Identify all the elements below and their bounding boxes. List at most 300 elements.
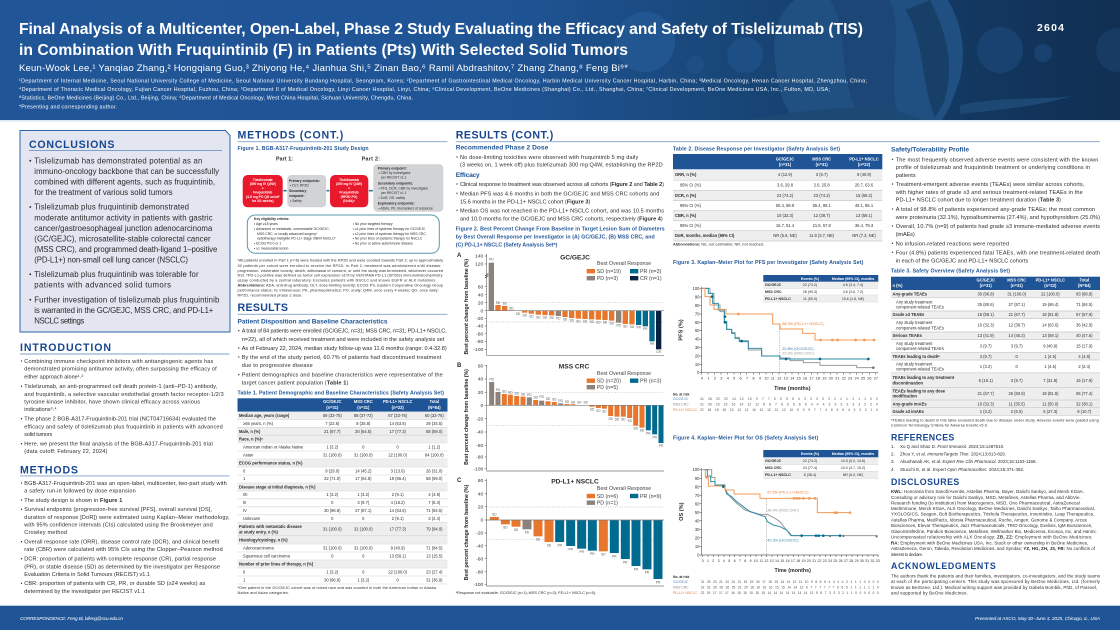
table 1: demographics: Unknown [243, 516, 261, 521]
table 1: demographics: GC/GEJC [323, 399, 342, 404]
disclosures: KWL: Honoraria from Sanofi/Aventis, Astellas Pharma, Bayer, Daiichi Sankyo, and Merck KGaA. [891, 489, 1084, 494]
figure 1 footnote: first. ᵇPD-L1-positive was defined as tumor cell expression ≥1% by VENTANA PD-L1 (SP263) immunohistochemistry [238, 274, 443, 278]
chart A: GC/GEJC waterfall: PR [650, 342, 655, 346]
table 1: demographics: 22 (100.0) [388, 452, 408, 458]
chart B: MSS CRC waterfall: PR [652, 435, 658, 439]
figure 4: OS Kaplan-Meier plot: 8 (36.4) [804, 473, 816, 477]
figure 1: study design: (N=84)ᵃ [343, 199, 355, 203]
figure 4: OS Kaplan-Meier plot: 10 [695, 544, 700, 549]
chart C: PD-L1+ NSCLC waterfall: -100 [473, 582, 484, 588]
figure 3: PFS Kaplan-Meier plot: 11 [771, 376, 775, 380]
table 2: disease response: MSS CRC [812, 156, 831, 161]
panel: methods: CBR: proportion of patients with CR, PR, or durable SD (≥24 weeks) as [24, 581, 206, 587]
chart B: MSS CRC waterfall: SD (n=20) [597, 379, 621, 385]
figure 3: PFS Kaplan-Meier plot: 18 [816, 376, 820, 380]
figure 4: OS Kaplan-Meier plot: 28 [849, 559, 853, 563]
figure 3: PFS Kaplan-Meier plot: 21 [835, 376, 839, 380]
safety and tolerability text: The most frequently observed adverse events were consistent with the known [896, 157, 1098, 163]
figure 4: OS Kaplan-Meier plot: GC/GEJC [673, 580, 689, 584]
figure 4: OS Kaplan-Meier plot: 20 [807, 559, 811, 563]
table 1: demographics: 31 (100.0) [354, 526, 373, 532]
panel: conclusions: is warranted in the GC/GEJC, MSS CRC, and PD-L1+ [34, 306, 214, 315]
chart B: MSS CRC waterfall: SD [546, 397, 551, 401]
chart A: GC/GEJC waterfall: SD [603, 321, 608, 325]
panel: introduction [20, 342, 230, 455]
table 2: disease response: 16.7, 51.4 [776, 223, 795, 228]
figure 1: study design: (300 mg IV Q4W) [250, 182, 276, 186]
table 3: safety overview: Serious TEAEs [892, 333, 923, 338]
chart B: MSS CRC waterfall: 60 [478, 363, 484, 369]
figure 3: PFS Kaplan-Meier plot: 100 [692, 286, 700, 291]
chart C: PD-L1+ NSCLC waterfall: PR [656, 580, 661, 584]
figure 4: OS Kaplan-Meier plot: 22 19 17 17 17 16 15 15 15 15 15 14 14 14 14 14 14 14 12 9 8 7 3 3 3 2 1 1 0 0 0 0 0 0 [701, 591, 879, 595]
references: Stucchi E, et al. Expert Opin Pharmacother. 2024;25:371-382. [900, 467, 1024, 472]
acknowledgments: known as BeiGene, Ltd.). Medical writing support was provided by Izabela Bombik, PhD, of Parexel, [891, 585, 1097, 590]
table 1: demographics: 0 [331, 500, 334, 505]
chart B: MSS CRC waterfall: B [457, 363, 462, 369]
panel: introduction: demonstrated promising antitumor activity, often surpassing the efficacy of [24, 366, 217, 372]
panel: conclusions: (PD-L1+) non-small cell lung cancer (NSCLC) [34, 256, 188, 265]
safety and tolerability text: Overall, 10.7% (n=9) of patients had grade ≥3 immune-mediated adverse events [896, 224, 1100, 230]
authors and affiliations: ⁴Department of Thoracic Medical Oncology, Fujian Cancer Hospital, Fuzhou, China; ⁵Department II of Medical Oncology, Linyi Cancer Hospital, Linyi, China; ⁶Clinical Development, BeOne Medicines (Shanghai) Co., Ltd., Shanghai, China; ⁷Clinical Development, BeOne Medicines USA, Inc., Fulton, MD, USA; [19, 87, 830, 93]
chart A: GC/GEJC waterfall: CR [656, 350, 662, 354]
panel: results: As of February 22, 2024, median study follow-up was 11.6 months (range: 0.4-32.8) [242, 346, 447, 352]
figure 3: PFS Kaplan-Meier plot: 3 [720, 376, 722, 380]
disclosures: Biosciences, Elevar Therapeutics, Jazz Pharmaceuticals, TRIO Oncology, Exelixis, IgM Biosciences, [891, 523, 1092, 528]
figure 4: OS Kaplan-Meier plot: 14 [775, 559, 779, 563]
figure 4: OS Kaplan-Meier plot: 13 [770, 559, 774, 563]
chart A: GC/GEJC waterfall: PD (n=3) [597, 276, 618, 282]
recommended phase 2 dose and efficacy text: No dose-limiting toxicities were observed with fruquintinib 5 mg daily [460, 155, 639, 161]
chart A: GC/GEJC waterfall: SD [596, 320, 601, 324]
figure 3: PFS Kaplan-Meier plot: Median (95% CI), months [832, 277, 874, 281]
table 3: safety overview: Any-grade TEAEs [892, 292, 928, 297]
table 3: safety overview: 13 (59.1) [1042, 333, 1059, 338]
table 2: disease response [673, 146, 882, 247]
table 1: demographics: 23 (27.4) [426, 570, 443, 574]
table 1: demographics: Median age, years (range) [239, 413, 290, 418]
figure 4: OS Kaplan-Meier plot: 10 [754, 559, 758, 563]
safety and tolerability text: patients [896, 173, 916, 179]
figure 1: study design: • Advanced or metastatic, unresectable GC/GEJC, [254, 227, 330, 231]
acknowledgments [891, 561, 1101, 596]
chart A: GC/GEJC waterfall: SD [502, 301, 508, 305]
figure 3: PFS Kaplan-Meier plot: 22 [842, 376, 846, 380]
figure 1: study design [238, 146, 443, 253]
panel: introduction: Tislelizumab, an anti-programmed cell death protein-1 (anti–PD-1) antibody, [24, 384, 218, 390]
figure 3: PFS Kaplan-Meier plot: 31 30 23 22 16 14 12 12 8 8 7 6 6 6 6 6 4 4 4 3 3 3 3 3 3 2 2 0 [700, 403, 878, 407]
figure 3: PFS Kaplan-Meier plot: 27 [874, 376, 878, 380]
figure 4: OS Kaplan-Meier plot: Time (months) [774, 568, 811, 574]
table 1: demographics: I/II [243, 492, 248, 497]
acknowledgments: and supported by BeOne Medicines. [891, 591, 968, 596]
table 2: disease response: (n=22) [858, 162, 871, 167]
table 3: safety overview: 27 (87.1) [1009, 302, 1026, 307]
table 1: demographics: ≥65 years, n (%) [243, 421, 274, 426]
chart C: PD-L1+ NSCLC waterfall: -20 [476, 531, 484, 537]
figure 3: PFS Kaplan-Meier plot: 25 [861, 376, 865, 380]
table 1: demographics: Squamous cell carcinoma [243, 554, 291, 558]
figure 3: PFS Kaplan-Meier plot: 22 18 15 15 13 13 12 10 12 12 12 12 10 9 9 9 7 7 4 6 5 5 4 3 3 2 1 0 [700, 408, 878, 412]
table 3: safety overview: 11 (50.0) [1042, 402, 1059, 406]
chart A: GC/GEJC waterfall: SD [516, 312, 521, 316]
figure 4: OS Kaplan-Meier plot: 25 [833, 559, 837, 563]
references [891, 433, 1037, 472]
table 3: safety overview: 2 (6.5) [1011, 409, 1023, 414]
chart C: PD-L1+ NSCLC waterfall: PD-L1+ NSCLC [551, 478, 599, 486]
acknowledgments: ACKNOWLEDGMENTS [891, 561, 996, 571]
table 1: demographics: 0 [331, 516, 334, 521]
figure 1: study design: Exploratory endpoints: [378, 201, 415, 205]
authors and affiliations [19, 63, 867, 110]
figure 3: PFS Kaplan-Meier plot: 60 [695, 320, 700, 325]
safety and tolerability text: in each of the GC/GEJC and PD-L1+ NSCLC cohorts [896, 258, 1029, 264]
table 1: demographics: (n=31) [326, 405, 339, 410]
table 1: demographics: 1 [243, 578, 246, 582]
figure 4: OS Kaplan-Meier plot: 48.4% (MSS CRC) [767, 509, 800, 513]
table 1: demographics: 9 (29.0) [325, 468, 340, 474]
table 3: safety overview: 9 (10.7) [1077, 409, 1092, 414]
figure 3: PFS Kaplan-Meier plot: 2 [714, 376, 716, 380]
title: in Combination With Fruquintinib (F) in Patients (Pts) With Selected Solid Tumors [19, 42, 628, 59]
chart B: MSS CRC waterfall: MSS CRC [559, 364, 589, 370]
figure 1: study design: • CBR by investigator [378, 171, 411, 175]
chart A: GC/GEJC waterfall: 40 [478, 292, 484, 298]
disclosures: Research funding (to institution) from Macrogenics, MSD, Ono Pharmaceutical, AstraZeneca/ [891, 500, 1081, 506]
chart C: PD-L1+ NSCLC waterfall: 60 [478, 478, 484, 484]
figure 3: PFS Kaplan-Meier plot: 15.6 (1.8, NE) [842, 297, 864, 301]
chart C: PD-L1+ NSCLC waterfall: SD [536, 538, 541, 542]
figure 4: OS Kaplan-Meier plot: 17 [791, 559, 795, 563]
table 1: demographics: Total [430, 399, 439, 404]
figure 3: PFS Kaplan-Meier plot: 30 [695, 345, 700, 350]
panel: methods: DCR: proportion of patients with complete response (CR), partial response [24, 556, 216, 562]
table 1: demographics: 1 (3.2) [326, 444, 339, 450]
chart B: MSS CRC waterfall: SD [514, 392, 520, 396]
table 1: demographics: 30 (96.8) [324, 578, 341, 582]
figure 4: OS Kaplan-Meier plot: 15 [780, 559, 784, 563]
chart B: MSS CRC waterfall: SD [508, 390, 513, 394]
table 2: disease response: 95% CI (%) [680, 182, 702, 188]
table 1: demographics: 21 (67.7) [324, 429, 341, 434]
figure 2 title: Figure 2. Best Percent Change From Baseline in Target Lesion Sum of Diameters [456, 227, 665, 233]
figure 1 footnote: RP2D, recommended phase 2 dose. [238, 293, 302, 297]
chart B: MSS CRC waterfall: PR [659, 444, 664, 448]
header banner [0, 0, 1120, 124]
references: Zhou Y, et al. ImmunoTargets Ther. 2024;13:813-829. [900, 452, 1006, 457]
safety and tolerability text: No infusion-related reactions were reported [896, 241, 1009, 247]
table 2: disease response: 4 (12.9) [778, 172, 793, 177]
references: 4. [891, 467, 895, 472]
chart A: GC/GEJC waterfall: Best Overall Response [597, 261, 651, 267]
table 1: demographics: 26 (31.0) [426, 468, 443, 474]
figure 4: OS Kaplan-Meier plot: Figure 4. Kaplan–Meier Plot for OS (Safety Analysis Set) [673, 435, 819, 441]
figure 4: OS Kaplan-Meier plot: 32 [870, 559, 874, 563]
chart A: GC/GEJC waterfall: CR (n=1) [640, 276, 662, 282]
table 2: disease response: 3.6, 29.8 [777, 182, 794, 188]
table 3: safety overview: 3 (9.7) [980, 354, 992, 359]
chart B: MSS CRC waterfall: 40 [478, 377, 484, 383]
table 3: safety overview: (n=31) [980, 283, 992, 288]
table 2: disease response: PD-L1+ NSCLC [849, 156, 879, 161]
figure 4: OS Kaplan-Meier plot: OS (%) [679, 502, 685, 521]
chart A: GC/GEJC waterfall: PR (n=3) [640, 269, 662, 275]
recommended phase 2 dose and efficacy text: (3 weeks on, 1 week off) plus tislelizumab 300 mg Q4W, establishing the RP2D [460, 163, 663, 169]
figure 4: OS Kaplan-Meier plot: 50 [695, 510, 700, 515]
figure 4: OS Kaplan-Meier plot: PD-L1+ NSCLC [765, 473, 791, 477]
chart A: GC/GEJC waterfall: PR [643, 327, 648, 331]
chart A: GC/GEJC waterfall: SD [522, 314, 528, 318]
table 3: safety overview: 18 (81.8) [1042, 391, 1059, 396]
panel: conclusions: Tislelizumab plus fruquintinib demonstrated [34, 203, 189, 212]
table 1: demographics: Race, n (%)ᵃ [239, 436, 263, 442]
figure 1: study design: • Safety [290, 199, 302, 203]
figure 1: study design: • ≤2 prior lines of systemic therapy for MSS CRC [353, 232, 426, 236]
table 1: demographics: 79 (94.0) [426, 526, 443, 532]
table 3: safety overview: (N=84) [1078, 283, 1091, 288]
table 2: disease response: DCR, n (%) [675, 193, 697, 198]
table 1: demographics: Male, n (%) [239, 429, 261, 434]
table 2: disease response: CBR, n (%) [675, 213, 697, 218]
figure 1: study design: radiotherapy-ineligible PD-L1+ stage IIIB/IV NSCLCᵇ [257, 236, 337, 240]
figure 4: OS Kaplan-Meier plot: 80 [695, 484, 700, 489]
chart C: PD-L1+ NSCLC waterfall: PR [590, 552, 595, 556]
table 3: safety overview: (n=22) [1044, 283, 1057, 288]
table 3: safety overview: 18 (58.1) [978, 312, 995, 317]
table 1: demographics: 1 (3.2) [326, 492, 339, 497]
figure 3: PFS Kaplan-Meier plot: 12 [777, 376, 781, 380]
references: 1. [891, 444, 895, 449]
figure 4: OS Kaplan-Meier plot: GC/GEJC [765, 459, 782, 463]
panel: introduction: and fruquintinib, a selective vascular endothelial growth factor receptor-1/2/3 [24, 392, 224, 398]
figure 4: OS Kaplan-Meier plot: 60 [695, 501, 700, 506]
figure 4: OS Kaplan-Meier plot: 21 [812, 559, 816, 563]
figure 3: PFS Kaplan-Meier plot: MSS CRC [673, 403, 689, 407]
chart B: MSS CRC waterfall: SD [502, 390, 507, 394]
chart A: GC/GEJC waterfall: SD [630, 325, 635, 329]
acknowledgments: at each of the participating centers. This study was sponsored by BeOne Medicines, Ltd. (formerly [891, 579, 1101, 584]
panel: methods: METHODS [20, 464, 78, 476]
table 3: safety overview: 7 (31.8) [1043, 378, 1058, 383]
table 1: demographics: (n=22) [392, 405, 404, 410]
figure 4: OS Kaplan-Meier plot: 10.5 (5.2, 14.6) [841, 459, 865, 463]
figure 1: study design: Figure 1. BGB-A317-Fruquintinib-201 Study Design [238, 146, 368, 152]
table 3: safety overview: 21 (67.7) [978, 391, 995, 396]
chart B: MSS CRC waterfall: SD [640, 429, 645, 433]
table 2: disease response: 3 (9.7) [816, 172, 828, 177]
chart A: GC/GEJC waterfall: SD [563, 318, 568, 322]
heading: results continued: RESULTS (CONT.) [456, 130, 553, 142]
table 1: demographics: ECOG performance status, n (%) [239, 460, 303, 466]
table 3: safety overview: 5 (16.1) [979, 378, 993, 383]
chart A: GC/GEJC waterfall: 20 [478, 300, 484, 306]
figure 4: OS Kaplan-Meier plot: 4 [723, 559, 725, 563]
figure 4: OS Kaplan-Meier plot: 30 [695, 527, 700, 532]
chart C: PD-L1+ NSCLC waterfall: Best percent change from baseline (%) [464, 484, 470, 580]
table 1: demographics: 13 (15.5) [426, 554, 443, 558]
table 1: demographics: 0 [362, 554, 365, 558]
chart B: MSS CRC waterfall: -60 [476, 443, 484, 449]
figure 4: OS Kaplan-Meier plot: 23 [823, 559, 827, 563]
figure 4: OS Kaplan-Meier plot: Median (95% CI), months [832, 452, 874, 456]
panel: introduction: The phase 2 BGB-A317-Fruquintinib-201 trial (NCT04716634) evaluated the [24, 416, 216, 422]
figure 1: study design: Part 1: [276, 157, 293, 163]
figure 3: PFS Kaplan-Meier plot: 16 [803, 376, 807, 380]
figure 3: PFS Kaplan-Meier plot: 26 [867, 376, 872, 380]
chart B: MSS CRC waterfall: -20 [476, 416, 484, 422]
safety and tolerability text: (imAEs) [896, 232, 915, 238]
panel: conclusions: NSCLC settings [34, 317, 84, 326]
table 3: safety overview: Any-grade imAEs [892, 402, 927, 406]
table 3: safety overview: 13 (41.9) [978, 333, 995, 338]
chart B: MSS CRC waterfall: SD [627, 419, 633, 423]
figure 4: OS Kaplan-Meier plot: 20 [695, 535, 700, 540]
figure 4: OS Kaplan-Meier plot: 8 [744, 559, 746, 563]
panel: results: Patient Disposition and Baseline Characteristics [238, 318, 388, 325]
table 1: demographics: Number of prior lines of therapy, n (%) [239, 562, 314, 566]
panel: methods: (PR), or stable disease (SD) as determined by the investigator per Response [24, 564, 220, 570]
table 1: demographics: 1 [243, 476, 246, 481]
table 3: safety overview: component-related TEAEs [896, 346, 944, 351]
figure 3: PFS Kaplan-Meier plot: Figure 3. Kaplan–Meier Plot for PFS per Investigator (Safety Analysis Set) [673, 260, 864, 266]
table 3: safety overview: 31 (100.0) [1007, 292, 1027, 297]
panel: introduction: INTRODUCTION [20, 342, 111, 354]
figure 3: PFS Kaplan-Meier plot: 4.6 (3.6, 7.2) [843, 290, 863, 294]
table 3: safety overview: 26 (83.9) [1009, 391, 1026, 396]
figure 4: OS Kaplan-Meier plot: 40 [695, 518, 700, 523]
table 1: demographics: 27 (87.1) [355, 508, 372, 513]
table 3: safety overview: TEAEs leading to deathᵇ [892, 354, 940, 359]
figure 1: study design: per RECIST v1.1 [381, 191, 407, 195]
figure 4: OS Kaplan-Meier plot: 2 [712, 559, 714, 563]
figure 4: OS Kaplan-Meier plot: 90 [695, 476, 700, 481]
table 3: safety overview: 0 [1016, 364, 1019, 369]
table 3: safety overview: modification [892, 394, 917, 399]
table 2: disease response: GC/GEJC [776, 156, 794, 161]
chart A: GC/GEJC waterfall: -80 [476, 339, 484, 345]
figure 3: PFS Kaplan-Meier plot: 0 [701, 376, 703, 380]
table 3: safety overview: MSS CRC [1007, 278, 1026, 283]
figure 3: PFS Kaplan-Meier plot: 40 [695, 337, 700, 342]
chart B: MSS CRC waterfall: SD [615, 418, 620, 422]
panel: conclusions: (GC/GEJC), microsatellite-stable colorectal cancer [34, 235, 211, 244]
chart A: GC/GEJC waterfall: 0 [481, 308, 484, 314]
table 1: demographics: MSS CRC [354, 399, 373, 404]
table 1: demographics: 19 (86.4) [390, 476, 407, 481]
chart A: GC/GEJC waterfall: SD [609, 321, 615, 325]
table 1: demographics: 2 (2.4) [428, 516, 441, 521]
chart C: PD-L1+ NSCLC waterfall: 0 [481, 518, 484, 524]
figure 3: PFS Kaplan-Meier plot: 58.3% (PD-L1+ NSCLC) [782, 322, 824, 326]
safety and tolerability text: Treatment-emergent adverse events (TEAEs) were similar across cohorts, [896, 182, 1085, 188]
table 1: demographics: 31 (100.0) [354, 452, 373, 458]
figure 3: PFS Kaplan-Meier plot: PD-L1+ NSCLC [673, 408, 698, 412]
title: Final Analysis of a Multicenter, Open-Label, Phase 2 Study Evaluating the Efficacy and Safety of Tislelizumab (TIS) [19, 21, 863, 38]
table 1: demographics: at study entry, n (%) [239, 530, 278, 534]
figure 1: study design: Secondary endpoints: [378, 182, 413, 186]
chart C: PD-L1+ NSCLC waterfall: SD [601, 553, 606, 557]
disclosures: Astellas Pharma, MedPacto, Idorsia Pharmaceutical, Roche, Amgen, Genome & Company, Arcus [891, 518, 1087, 522]
figure 3: PFS Kaplan-Meier plot: 20 [829, 376, 833, 380]
recommended phase 2 dose and efficacy text: 15.6 months in the PD-L1+ NSCLC cohort (Figure 3) [460, 199, 590, 205]
figure 4: OS Kaplan-Meier plot: 40.3% (GC/GEJC) [767, 538, 799, 542]
chart B: MSS CRC waterfall: SD [552, 398, 557, 402]
panel: introduction: tyrosine kinase inhibitor, have shown clinical efficacy across various [24, 400, 200, 406]
table 1: demographics: 0 [243, 570, 246, 574]
chart A: GC/GEJC waterfall: 120 [475, 262, 484, 268]
panel: introduction: Combining immune checkpoint inhibitors with antiangiogenic agents has [24, 359, 214, 365]
table 3: safety overview: 1 (4.5) [1044, 364, 1057, 369]
panel: methods: The study design is shown in Figure 1 [24, 498, 122, 504]
table 2: disease response: 36.4, 79.3 [855, 223, 874, 228]
table 3: safety overview [891, 269, 1100, 428]
table 1: demographics: 31 (100.0) [323, 452, 342, 458]
chart C: PD-L1+ NSCLC waterfall: Best Overall Response [597, 486, 651, 492]
chart C: PD-L1+ NSCLC waterfall: PR [623, 560, 628, 564]
figure 3: PFS Kaplan-Meier plot: 11 (50.0) [803, 297, 817, 301]
disclosures: GlaxoSmithKline, Pandion Bioscience, Metafines, Wellmarker Bio, Medicenna, Exosca, Inc, and Hanmi. [891, 529, 1097, 534]
chart A: GC/GEJC waterfall: 140 [475, 254, 484, 260]
panel: methods: rate (CBR) were calculated with 95% CIs using the Clopper–Pearson method [24, 547, 223, 553]
chart B: MSS CRC waterfall: PD [539, 395, 545, 399]
figure 1 footnote: assay conducted by a central laboratory. Excludes patients with NSCLC and known EGFR or ALK mutations. [238, 278, 436, 282]
chart A: GC/GEJC waterfall: -100 [473, 347, 484, 353]
figure 4: OS Kaplan-Meier plot: 3 [718, 559, 720, 563]
figure 3: PFS Kaplan-Meier plot: 4.6 (3.4, 7.4) [843, 283, 863, 287]
table 1: demographics: 0 [362, 444, 365, 450]
table 1: demographics: 58 (69.0) [426, 429, 443, 434]
table 2: disease response: 95% CI (%) [680, 203, 702, 208]
safety and tolerability text: with higher rates of grade ≥3 and serious treatment-related TEAEs in the [895, 190, 1083, 196]
table 2: disease response: (n=31) [779, 162, 792, 167]
authors and affiliations: *Presenting and corresponding author. [19, 104, 117, 110]
table 1: demographics: 2 (9.1) [392, 516, 404, 521]
recommended phase 2 dose and efficacy text: Clinical response to treatment was observed across all cohorts (Figure 2 and Table 2) [460, 182, 664, 188]
table 2: disease response: Abbreviations: NE, not estimable; NR, not reached. [673, 243, 764, 247]
table 1: demographics: 0 [362, 570, 365, 574]
recommended phase 2 dose and efficacy text [456, 145, 664, 222]
panel: results: target cancer patient population (Table 1) [242, 380, 348, 386]
table 1: demographics: 4 (18.2) [391, 500, 405, 505]
table 3: safety overview: 57 (67.9) [1076, 312, 1093, 317]
chart C: PD-L1+ NSCLC waterfall: 20 [478, 504, 484, 510]
table 3: safety overview: 0 [1016, 354, 1019, 359]
references: 3. [891, 459, 895, 464]
chart B: MSS CRC waterfall: SD [590, 408, 595, 412]
figure 1: study design: MSS CRC, or locally advanced surgery/ [257, 232, 317, 236]
figure 4: OS Kaplan-Meier plot: 100 [692, 467, 700, 472]
table 3: safety overview: 14 (45.2) [1009, 333, 1026, 338]
figure 1: study design: • Age ≥18 years [254, 222, 278, 226]
table 2: disease response: 21.8, 57.8 [813, 223, 832, 228]
table 1: demographics: 71 (84.5) [426, 546, 443, 550]
title [19, 21, 863, 59]
table 2: disease response: 15 (68.2) [856, 193, 873, 198]
disclosures [891, 477, 1097, 557]
figure 4: OS Kaplan-Meier plot: 10.0 (4.7, 15.2) [841, 466, 865, 470]
figure 3: PFS Kaplan-Meier plot: PD-L1+ NSCLC [765, 297, 791, 301]
table 3: safety overview: Table 3. Safety Overview (Safety Analysis Set) [891, 269, 1010, 275]
acknowledgments: The authors thank the patients and their families, investigators, co-investigators, and the study teams [891, 574, 1101, 579]
panel: methods: Crowley method [24, 530, 67, 536]
chart B: MSS CRC waterfall: SD [521, 392, 526, 396]
panel: methods: BGB-A317-Fruquintinib-201 was an open-label, multicenter, two-part study with [24, 481, 227, 487]
figure 3: PFS Kaplan-Meier plot: 80 [695, 303, 700, 308]
chart B: MSS CRC waterfall: SD [596, 409, 601, 413]
table 3: safety overview: 71 (84.5) [1076, 302, 1093, 307]
figure 1: study design: Fruquintinib [339, 191, 359, 195]
table 2: disease response: NR (7.3, NE) [852, 233, 876, 238]
